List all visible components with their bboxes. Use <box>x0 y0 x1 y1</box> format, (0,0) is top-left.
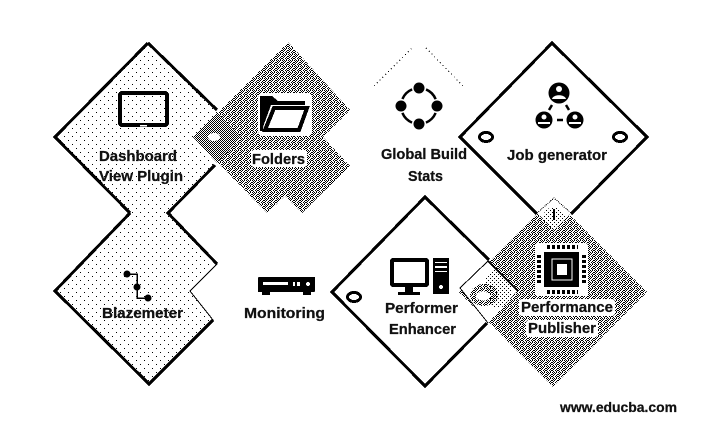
label: Folders: Folders <box>252 152 305 168</box>
label: Dashboard View Plugin: Dashboard <box>99 149 177 165</box>
icon: monitoring device <box>258 277 315 295</box>
label: Global Build Stats: Global Build <box>381 147 467 163</box>
panel: Folders dithered shape <box>193 42 350 213</box>
panel: Global Build Stats dotted outline <box>374 48 463 86</box>
label: Performer Enhancer: Performer <box>385 301 458 317</box>
icon: tablet monitor <box>120 93 167 126</box>
panel: Performance Publisher dithered diamond <box>459 198 647 387</box>
icon: performer connector oval <box>348 292 360 302</box>
icon: folder <box>258 93 312 136</box>
icon: job generator right connector oval <box>614 132 626 142</box>
icon: blazemeter path nodes <box>124 270 152 302</box>
label: website footer: www.educba.com <box>559 400 677 415</box>
label: Monitoring: Monitoring <box>244 306 325 322</box>
panel: Job generator diamond <box>460 43 647 214</box>
icon: job generator left connector oval <box>480 132 492 142</box>
label: Global Build Stats <box>381 147 467 185</box>
icon: desktop computer <box>392 258 449 295</box>
label: Performer Enhancer <box>385 301 458 338</box>
label: Performance Publisher: Performance <box>521 300 613 316</box>
label: Dashboard View Plugin <box>99 149 183 185</box>
label: Performance Publisher <box>519 299 615 337</box>
icon: global build stats ring <box>396 82 442 130</box>
panel: Performer Enhancer diamond <box>332 197 520 386</box>
label: Performer Enhancer: Enhancer <box>389 322 456 338</box>
panel: Dashboard View Plugin and Blazemeter dotted shape <box>55 43 217 384</box>
label: Performance Publisher: Publisher <box>528 321 596 337</box>
label: Blazemeter: Blazemeter <box>102 306 183 322</box>
label: Job generator: Job generator <box>507 148 607 164</box>
top overlap tip <box>537 198 571 230</box>
icon: processor chip <box>535 243 588 296</box>
label: Global Build Stats: Stats <box>408 169 443 185</box>
left overlap tip <box>460 261 518 323</box>
icon: job generator people network <box>536 82 584 128</box>
label: Dashboard View Plugin: View Plugin <box>99 169 183 185</box>
